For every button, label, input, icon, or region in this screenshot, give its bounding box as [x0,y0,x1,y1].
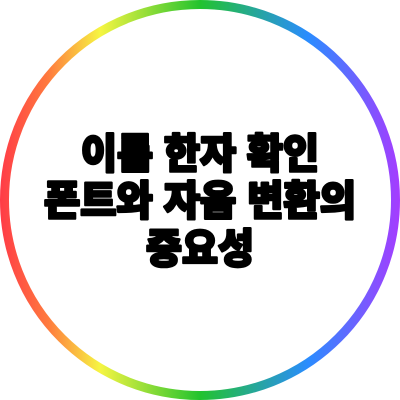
title: 폰트와 자음 변환의 [44,178,356,224]
title: 이름 한자 확인 [81,131,319,177]
title [44,131,356,272]
title: 중요성 [146,226,254,272]
